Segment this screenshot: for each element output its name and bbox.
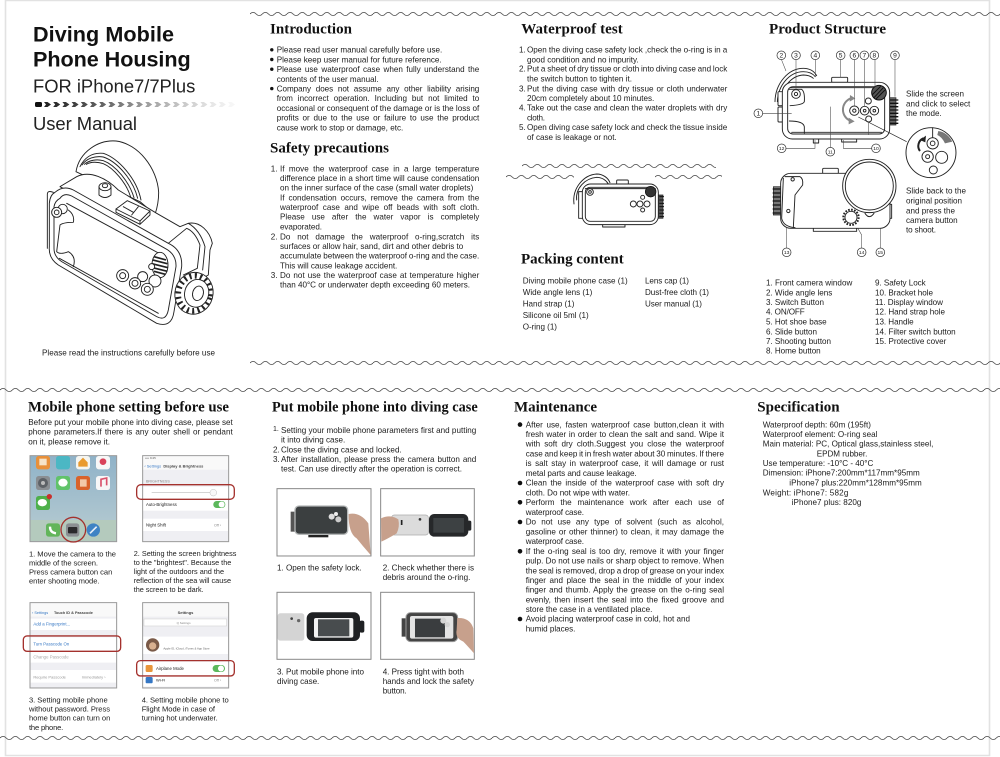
panel: packing content [521, 251, 709, 332]
bullet list: waterproof case. [525, 537, 584, 546]
caption 3: without password. Press [28, 705, 110, 714]
instruction: select mode: Slide the screen [906, 90, 964, 99]
caption 4: turning hot underwater. [142, 714, 218, 723]
panel: product structure [754, 22, 971, 356]
number labels: 14 [859, 250, 865, 256]
caption 1: middle of the screen. [29, 559, 98, 568]
screenshot: home screen [30, 456, 117, 542]
parts legend column 1: 8. Home button [766, 347, 821, 356]
heading: Product Structure [769, 22, 886, 38]
screenshot: touch id and passcode: Change Passcode [33, 654, 69, 659]
numbered list: 2. [271, 232, 277, 241]
numbered list: than 40°C or underwater depth exceeding 60 meters. [280, 281, 470, 290]
numbered steps [519, 45, 728, 142]
illustration: housing line drawing [47, 141, 218, 324]
screenshot: touch id and passcode: Add a Fingerprint... [33, 622, 70, 627]
bullet list: cloth. Do not wipe with water. [526, 488, 630, 497]
photo captions: 1. Open the safety lock. [277, 563, 362, 572]
heading: Put mobile phone into diving case [272, 400, 478, 416]
screenshot: touch id and passcode: ‹ Settings [32, 611, 48, 615]
manual label: User Manual [33, 113, 137, 134]
photo captions: button. [383, 686, 407, 695]
numbered steps: 2. [273, 445, 280, 454]
title [33, 22, 191, 72]
caption 2: 2. Setting the screen brightness [134, 549, 237, 558]
parts legend column 2: 10. Bracket hole [875, 288, 933, 297]
numbered steps: Open the diving case safety lock ,check the o-ring is in a [527, 45, 728, 54]
screenshots [23, 456, 234, 688]
numbered steps: 2. [519, 65, 526, 74]
parts legend column 1: 6. Slide button [766, 327, 817, 336]
spec list: iPhone7 plus: 820g [792, 498, 861, 507]
packing list column 2 [645, 276, 709, 309]
bullet list: pulp. Do not use nails or sharp object to remove. When [526, 557, 724, 566]
bullet list [518, 420, 725, 634]
intro text [28, 418, 233, 446]
numbered list: If condensation occurs, remove the camera from the [280, 193, 480, 202]
screenshot: settings airplane mode: Apple ID, iCloud, iTunes & App Store [163, 646, 210, 650]
back view [773, 159, 896, 231]
spec list: Dimension: iPhone7:200mm*117mm*95mm [763, 469, 920, 478]
number labels: 8 [872, 53, 876, 60]
photo captions: 2. Check whether there is [383, 563, 474, 572]
caption 1: Press camera button can [29, 568, 112, 577]
photo captions: 3. Put mobile phone into [277, 668, 364, 677]
heading: Mobile phone setting before use [28, 400, 229, 416]
bullet list: If the o-ring seal is too dry, remove it with your finger [526, 547, 724, 556]
numbered steps: Close the diving case and locked. [281, 445, 402, 454]
intro text: on it, please remove it. [28, 437, 110, 446]
number labels: 1 [756, 111, 760, 118]
panel: put mobile phone into diving case [272, 400, 478, 695]
heading: Maintenance [514, 400, 597, 416]
numbered steps: of case is leakage or not. [527, 133, 617, 142]
bullet list: the seal is removed, drop a drop of grease on your index [526, 566, 724, 575]
number labels: 9 [893, 53, 897, 60]
numbered steps: Open diving case safety lock and check the tissue inside [527, 123, 728, 132]
illustration: small housing front view [574, 174, 664, 227]
number labels: 6 [852, 53, 856, 60]
numbered steps: 20cm completely about 10 minutes. [527, 94, 654, 103]
title: Phone Housing [33, 47, 191, 72]
screenshot: display and brightness: Off › [214, 523, 222, 527]
parts legend column 1: 3. Switch Button [766, 298, 824, 307]
numbered list: evaporated. [280, 223, 322, 232]
bullet list: humid places. [526, 625, 575, 634]
photo 1: open safety lock [277, 489, 371, 556]
number labels: 10 [873, 146, 879, 152]
number labels: 7 [862, 53, 866, 60]
panel: introduction [270, 22, 480, 132]
heading: Introduction [270, 22, 353, 38]
numbered list: 1. [271, 164, 277, 173]
packing list column 2: Dust-free cloth (1) [645, 288, 709, 297]
panel: waterproof test [519, 22, 728, 142]
parts legend column 1: 4. ON/OFF [766, 308, 805, 317]
caption 2 [134, 549, 237, 594]
spec list: EPDM rubber. [817, 449, 867, 458]
caption 2: reflection of the sea will cause [134, 576, 231, 585]
screenshot: settings airplane mode: Settings [178, 610, 194, 615]
bullet list: is salt stay in waterproof case, it will damage or rust [526, 459, 725, 468]
heading: Specification [757, 400, 840, 416]
caption 1: enter shooting mode. [29, 577, 100, 586]
packing list column 1: Silicone oil 5ml (1) [523, 311, 589, 320]
packing list column 2: User manual (1) [645, 300, 702, 309]
numbered list: accumulate between the waterproof o-ring and the case. [280, 252, 479, 261]
spec list: Use temperature: -10°C - 40°C [763, 459, 874, 468]
caption 4: Flight Mode in case of [142, 705, 216, 714]
parts legend column 2: 12. Hand strap hole [875, 308, 945, 317]
caption 1 [29, 549, 116, 586]
spec list [763, 420, 933, 507]
bullet list: with soft dry cloth.Suggest you close the waterproof [525, 440, 725, 449]
parts legend column 1: 2. Wide angle lens [766, 288, 832, 297]
spec list: Weight: iPhone7: 582g [763, 488, 848, 497]
screenshot: settings airplane mode: Off › [214, 679, 222, 683]
parts legend column 1 [766, 279, 852, 356]
panel: cover [33, 22, 235, 358]
magnified detail [906, 128, 956, 178]
numbered steps: Setting your mobile phone parameters first and putting [281, 426, 476, 435]
screenshot: settings airplane mode [137, 603, 234, 688]
number labels: 3 [794, 53, 798, 60]
bullet list: metal parts and cause leakage. [526, 469, 637, 478]
arrow strip [35, 102, 235, 107]
bullet list: Please read user manual carefully before use. [277, 46, 442, 55]
screenshot: touch id and passcode: Require Passcode [33, 674, 67, 679]
caption 1: 1. Move the camera to the [29, 549, 116, 558]
instruction: shoot: Slide back to the [906, 187, 966, 196]
panel: specification [757, 400, 933, 507]
spec list: iPhone7 plus:220mm*128mm*95mm [789, 478, 922, 487]
number labels [756, 53, 897, 256]
bullet list: evenly, then insert the seal into the fixed groove and [526, 595, 724, 604]
bullet list: Please use waterproof case when fully understand the [277, 65, 480, 74]
caption 3: 3. Setting mobile phone [29, 695, 108, 704]
heading: Waterproof test [521, 22, 623, 38]
caption 2: to the "brightest". Because the [134, 558, 231, 567]
bullet list: Avoid placing waterproof case in cold, hot and [526, 615, 690, 624]
parts legend column 2: 11. Display window [875, 298, 943, 307]
photos [277, 489, 474, 659]
caption 4 [142, 695, 229, 723]
bullet list: Perform the maintenance work after each use of [526, 498, 725, 507]
numbered list: This will cause leakage accident. [280, 261, 397, 270]
screenshot: settings airplane mode: Q Settings [177, 621, 191, 625]
screenshot: display and brightness: Display & Brightness [163, 463, 204, 468]
numbered steps: After installation, please press the camera button and [281, 455, 476, 464]
parts legend column 2: 13. Handle [875, 318, 914, 327]
bullet list: Company does not assume any other liability arising [277, 84, 479, 94]
subtitle: FOR iPhone7/7Plus [33, 75, 195, 96]
bullet list: Please keep user manual for future reference. [277, 55, 442, 64]
photo 3: put phone in [277, 592, 371, 659]
screenshot: display and brightness [137, 456, 234, 542]
caption 2: the screen to be dark. [134, 585, 204, 594]
panel: maintenance [514, 400, 725, 634]
instruction: shoot: camera button [906, 216, 958, 225]
numbered steps: 4. [519, 104, 526, 113]
bullet list: contents of the user manual. [277, 75, 379, 84]
parts legend column 2: 14. Filter switch button [875, 327, 956, 336]
parts legend column 2: 9. Safety Lock [875, 279, 927, 288]
numbered list: Do not use the waterproof case at temperature higher [280, 271, 480, 280]
bullet list: occasional or consequent of the damage or is the loss of [277, 104, 480, 113]
parts legend column 1: 5. Hot shoe base [766, 318, 827, 327]
numbered list: difference place in a short time will cause condensation [280, 174, 479, 183]
photo 4: press tight [381, 592, 474, 659]
title: Diving Mobile [33, 22, 174, 47]
screenshot: touch id and passcode: Touch ID & Passcode [54, 611, 93, 615]
photo captions [277, 563, 475, 695]
numbered steps: test. Can use directly after the operation is correct. [281, 465, 462, 474]
bullet list: from incorrect operation. Including but not limited to [277, 94, 480, 103]
photo captions: diving case. [277, 677, 319, 686]
diagram: housing front and back with callouts [754, 51, 956, 257]
bullet list: store the case in a ventilated place. [526, 605, 652, 614]
caption 4: 4. Setting mobile phone to [142, 695, 229, 704]
bullet list: Clean the inside of the waterproof case with soft dry [526, 479, 725, 488]
number labels: 4 [813, 53, 817, 60]
instruction: select mode: and click to select [906, 99, 971, 108]
number labels: 12 [779, 146, 785, 152]
screenshot: display and brightness: BRIGHTNESS [146, 480, 170, 484]
bullet list: gasoline or other thinner) to clean, it may damage the [526, 527, 724, 536]
screenshot: display and brightness: •••• 9:25 [145, 456, 156, 460]
numbered list [271, 164, 480, 290]
numbered steps: 1. [519, 45, 526, 54]
screenshot: touch id and passcode: Immediately › [82, 674, 106, 679]
numbered steps: good condition and no impurity. [527, 55, 639, 64]
screenshot: settings airplane mode: Wi-Fi [156, 678, 165, 683]
bullet list: fresh water in order to clean the salt and sand. Wipe it [526, 430, 725, 439]
numbered list: waterproof case and wipe off beads with soft cloth. [279, 203, 479, 212]
numbered steps: 3. [519, 84, 526, 93]
bullet list: cause work to stop or damage, etc. [277, 123, 403, 132]
photo captions: hands and lock the safety [383, 677, 475, 686]
parts legend column 1: 7. Shooting button [766, 337, 831, 346]
instruction: shoot: to shoot. [906, 226, 936, 235]
numbered list: Please use after the water vapor is completely [280, 213, 480, 222]
instruction: select mode: the mode. [906, 109, 942, 118]
numbered steps: cloth. [527, 113, 545, 122]
numbered steps: 3. [273, 455, 280, 464]
packing list column 2: Lens cap (1) [645, 276, 689, 285]
front view [775, 68, 898, 143]
spec list: Waterproof depth: 60m (195ft) [763, 420, 871, 429]
photo 2: check o-ring [381, 489, 474, 556]
bullet list [270, 46, 480, 132]
footer note: Please read the instructions carefully before use [42, 349, 215, 358]
instruction: shoot: and press the [906, 206, 955, 215]
numbered steps [273, 426, 476, 474]
numbered steps: the switch button to tighten it. [527, 74, 632, 83]
bullet list: waterproof case. [525, 508, 584, 517]
packing list column 1: Diving mobile phone case (1) [523, 276, 628, 285]
intro text: Before put your mobile phone into diving case, please set [28, 418, 233, 427]
screenshot: touch id and passcode [23, 603, 121, 688]
numbered list: 3. [271, 271, 277, 280]
screenshot: touch id and passcode: Turn Passcode On [33, 642, 70, 647]
packing list column 1: O-ring (1) [523, 323, 557, 332]
number labels: 13 [784, 250, 790, 256]
numbered list: on the inner surface of the case (small water droplets) [280, 184, 474, 193]
panel: mobile phone setting [23, 400, 237, 732]
number labels: 11 [828, 149, 833, 155]
numbered steps: Put a sheet of dry tissue or cloth into diving case and lock [527, 65, 728, 74]
number labels: 15 [878, 250, 883, 256]
spec list: Waterproof element: O-ring seal [763, 430, 878, 439]
bullet list: profits or due to the use or failure to use the product [277, 114, 480, 123]
bullet list: case and keep it in fresh water about 30 minutes. If there [526, 449, 724, 458]
numbered list: Do not damage the waterproof o-ring,scratch its [280, 232, 479, 241]
numbered list: surfaces or allow hair, sand, dirt and other debris to [280, 242, 464, 251]
spec list: Main material: PC, Optical glass,stainless steel, [763, 440, 933, 449]
callout leader lines [763, 59, 907, 248]
number badges [754, 51, 899, 257]
instruction: shoot [906, 187, 966, 235]
heading: Packing content [521, 251, 624, 267]
instruction: shoot: original position [906, 197, 962, 206]
heading: Safety precautions [270, 141, 389, 157]
numbered steps: 5. [519, 123, 526, 132]
instruction: select mode [906, 90, 971, 118]
bullet list: Do not use any type of solvent (such as alcohol, [526, 518, 724, 527]
numbered list: If move the waterproof case in a large temperature [280, 164, 480, 173]
screenshot: settings airplane mode: Airplane Mode [156, 666, 184, 671]
packing list column 1: Wide angle lens (1) [523, 288, 593, 297]
bullet list: After use, fasten waterproof case button,clean it with [526, 420, 724, 429]
numbered steps: Put the diving case with dry tissue or cloth underwater [527, 84, 728, 93]
photo captions: debris around the o-ring. [383, 573, 470, 582]
packing list column 1 [523, 276, 628, 332]
screenshot: display and brightness: Night Shift [146, 522, 167, 527]
caption 3: the phone. [29, 723, 63, 732]
caption 3 [28, 695, 110, 732]
numbered steps: 1. [273, 426, 279, 433]
parts legend column 2: 15. Protective cover [875, 337, 947, 346]
parts legend column 2 [875, 279, 956, 346]
caption 2: light of the outdoors and the [134, 567, 224, 576]
panel: safety precautions [270, 141, 480, 290]
packing list column 1: Hand strap (1) [523, 300, 575, 309]
parts legend column 1: 1. Front camera window [766, 279, 852, 288]
bullet list: finger and place the seal in the middle of your index [526, 576, 724, 585]
photo captions: 4. Press tight with both [383, 668, 464, 677]
screenshot: display and brightness: Auto-Brightness [146, 502, 177, 507]
intro text: phone parameters.If there is any outer shell or pendant [28, 428, 233, 437]
numbered steps: Take out the case and clean the water droplets with dry [527, 104, 728, 113]
caption 3: home button can turn on [29, 714, 110, 723]
screenshot: display and brightness: ‹ Settings [144, 463, 161, 468]
number labels: 5 [839, 53, 843, 60]
number labels: 2 [779, 53, 783, 60]
numbered steps: it into diving case. [281, 436, 345, 445]
bullet list: finger and thumb. Apply the grease on the o-ring seal [526, 586, 724, 595]
